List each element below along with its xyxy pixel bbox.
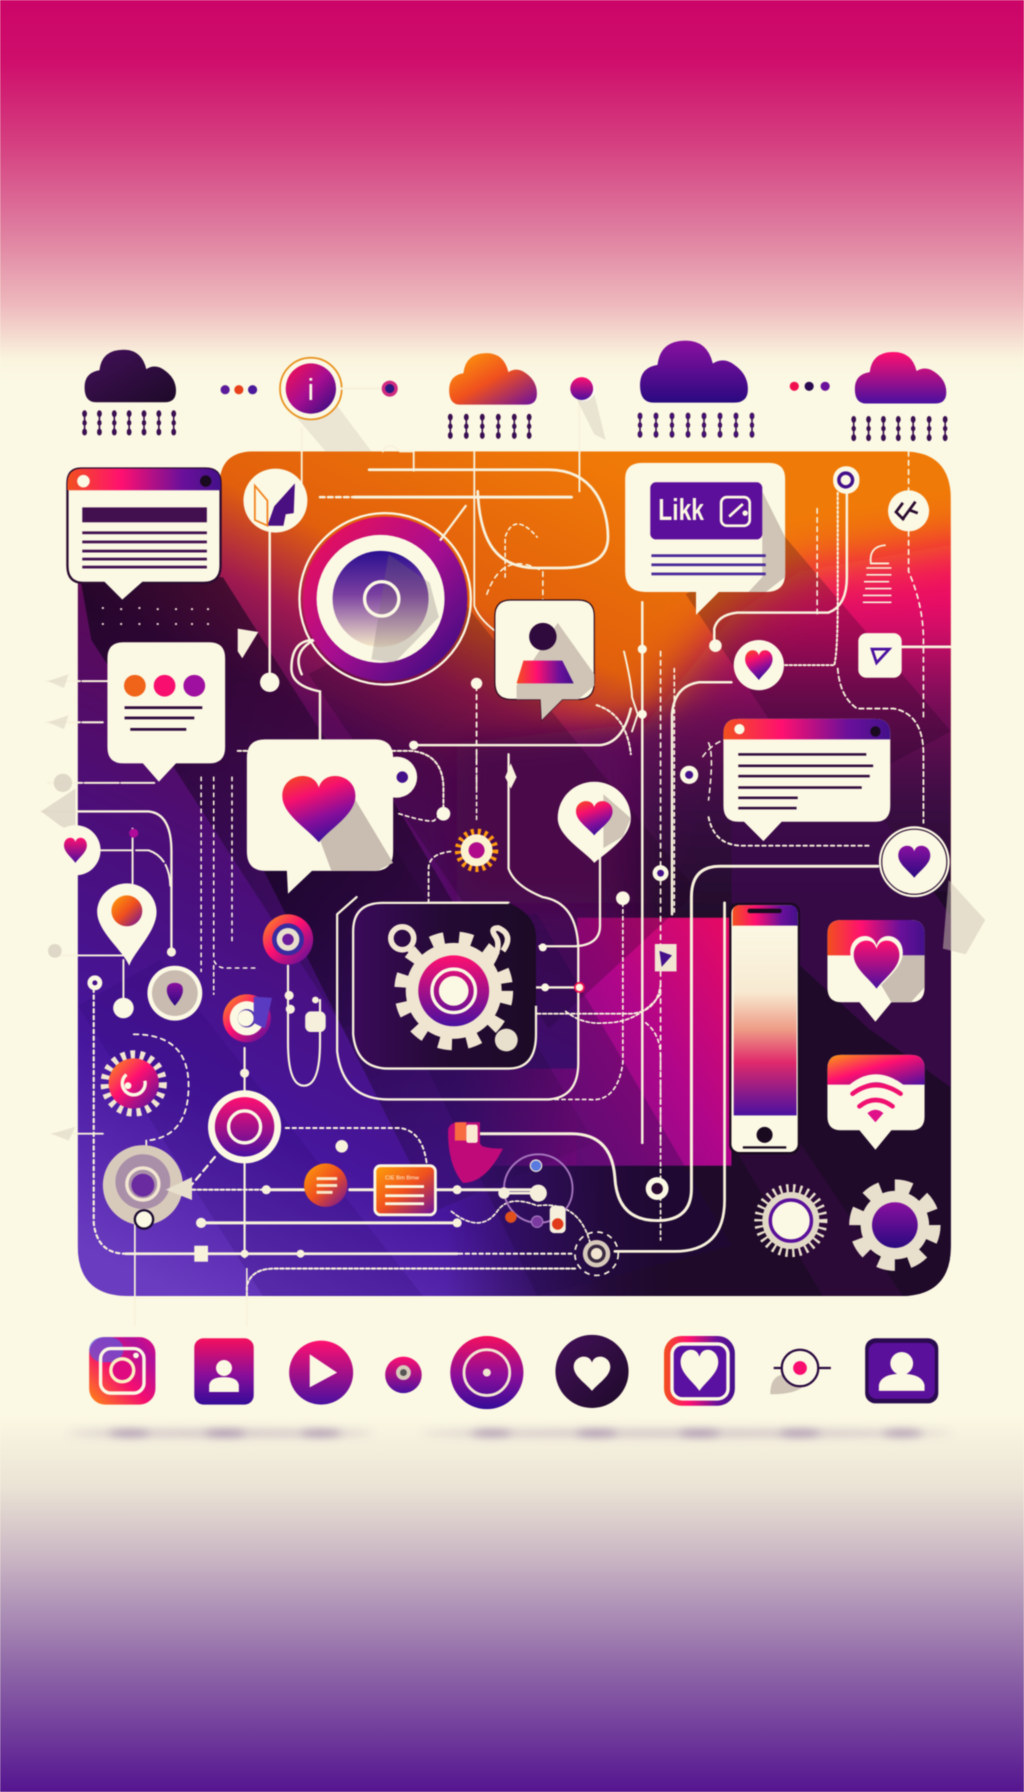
notch [747, 909, 782, 913]
small hook and stripes [863, 545, 891, 602]
node [113, 998, 134, 1018]
center ring [365, 582, 399, 616]
list card [375, 1166, 435, 1215]
glow tab [448, 1122, 503, 1183]
wifi arcs [848, 1078, 905, 1106]
like card [625, 463, 785, 615]
long shadow: like card [686, 538, 950, 763]
line end nodes [194, 1185, 462, 1262]
center gear module [353, 903, 536, 1069]
home button [757, 1127, 773, 1143]
left column items [41, 674, 202, 1229]
shade [320, 789, 393, 871]
title bar [723, 719, 890, 739]
pin heart bubble [558, 782, 631, 863]
bubble [625, 463, 785, 615]
speech bubble: heart [247, 739, 417, 894]
card title bar [67, 469, 221, 490]
ring [299, 513, 471, 685]
bubble [247, 739, 393, 894]
lines: network connectors [41, 400, 951, 1326]
heart tile [827, 920, 925, 1022]
shoulders [517, 661, 574, 683]
label icon [721, 497, 750, 526]
long shadow: center gear [429, 914, 684, 1295]
icon: user square [194, 1338, 254, 1405]
capsule node [305, 1011, 326, 1032]
node dot under M badge [260, 673, 279, 692]
small lock node [680, 766, 698, 784]
list card: CIE Bm Bmw [385, 1175, 420, 1181]
title bar dots [77, 475, 211, 487]
sun icon [459, 833, 494, 867]
handle [376, 757, 417, 798]
small ring [87, 975, 102, 990]
text lines [82, 507, 207, 568]
lens [333, 551, 429, 647]
orange list badge [304, 1163, 347, 1207]
icon: top right ring node [833, 466, 859, 494]
dots [124, 675, 205, 697]
small nodes [409, 639, 722, 821]
dots trio left [221, 385, 257, 394]
location pin [97, 883, 157, 966]
shade [517, 623, 594, 720]
icon: info badge [280, 358, 371, 451]
connector node [341, 381, 398, 397]
long shadow: window [81, 576, 392, 1025]
icon: ring target [450, 1336, 523, 1409]
phone [729, 903, 800, 1154]
cloud: orange [448, 353, 537, 438]
icon: heart tile [664, 1336, 735, 1406]
icon: small badge [858, 633, 902, 678]
icon: M envelope badge [243, 469, 307, 533]
label text: Likk [658, 492, 705, 527]
cloud: pink [852, 352, 947, 441]
gear body [406, 943, 502, 1039]
icon: crossed badge [888, 490, 929, 531]
gear core [418, 955, 489, 1026]
speech bubble: three dots [107, 642, 225, 782]
pointer tick [440, 505, 466, 541]
section: bottom icon row [89, 1335, 938, 1409]
icon: person tile [865, 1338, 938, 1403]
icon: info badge: i [307, 372, 314, 407]
gear center [439, 976, 469, 1006]
gear [105, 1055, 162, 1112]
magenta block [577, 918, 731, 1166]
icon: heart circle top right [734, 640, 784, 690]
text lines [651, 554, 766, 575]
sun gear bottom right [760, 1190, 822, 1251]
purple label [650, 482, 762, 539]
phone body [731, 905, 798, 1152]
gear rings [432, 969, 475, 1013]
drop oval [147, 966, 202, 1021]
heart [282, 776, 355, 842]
heart ring right [879, 826, 985, 954]
center plum darkening [459, 706, 686, 898]
text lines [738, 753, 873, 809]
small target [263, 914, 313, 965]
inner cream disc [317, 535, 445, 663]
gradient disc [303, 517, 467, 681]
tile [827, 1055, 925, 1150]
long shadow: lower left [80, 1004, 422, 1296]
gear bottom right [859, 1190, 930, 1261]
end ring [646, 1177, 669, 1200]
card body [67, 469, 221, 601]
head [529, 623, 557, 650]
dial [575, 1232, 618, 1275]
connector nodes right of gear [539, 865, 669, 992]
long shadow: lens [309, 606, 668, 1028]
tile top band [827, 1055, 925, 1085]
dark plum diagonal stripes [731, 820, 951, 1087]
base line [743, 1146, 786, 1149]
long shadow: heart bubble [251, 800, 594, 1211]
lower knob [495, 1029, 518, 1051]
small flag tile [655, 944, 677, 971]
icon: play [289, 1341, 353, 1405]
card body [723, 719, 890, 841]
bubble [495, 600, 594, 720]
small purple dot [129, 829, 138, 838]
icon: dark heart [555, 1335, 629, 1408]
phone outline [729, 903, 800, 1154]
window card: top left [67, 469, 221, 601]
shadow: under icon row [67, 1429, 953, 1437]
small chain nodes [167, 947, 319, 1078]
cloud: dark [83, 350, 176, 435]
card shade [749, 491, 785, 592]
tile top band [827, 920, 925, 955]
big target lens [299, 505, 471, 685]
right side crimson to dark field [618, 509, 952, 1296]
heart [850, 936, 903, 991]
gear teeth [403, 941, 504, 1041]
wifi tile [827, 1055, 925, 1150]
magenta fade left of block [482, 1068, 578, 1166]
wifi drop [867, 1110, 883, 1122]
window card: right [723, 719, 890, 841]
left stubs [41, 674, 75, 1141]
panel: network board [77, 450, 952, 1297]
icon: small pennant [238, 629, 258, 658]
panel base gradient [69, 446, 960, 1303]
target medium [208, 1090, 281, 1163]
heart circle [50, 825, 101, 875]
bubble [107, 642, 225, 782]
tile shade [880, 955, 925, 1002]
lines [125, 706, 202, 731]
phone top bar [733, 905, 798, 926]
long shadow: phone [731, 1143, 903, 1296]
title dots [734, 724, 881, 737]
lens shade [371, 554, 439, 663]
dots trio right [790, 382, 830, 391]
user card bubble [495, 600, 594, 720]
icon: small target [385, 1357, 422, 1393]
phone screen [734, 926, 797, 1115]
section: top cloud row [83, 341, 947, 451]
C icon [223, 994, 272, 1042]
heart inner [854, 941, 899, 989]
orbit diagram [498, 1154, 573, 1233]
dotted grid under window [102, 607, 209, 625]
lower center cluster [194, 1090, 669, 1275]
gear tile background [353, 903, 536, 1069]
node: magenta dot [570, 377, 606, 440]
dark lower right field [906, 892, 952, 1296]
gear tile outline [353, 903, 536, 1069]
diamond marker [505, 763, 517, 789]
left hook [391, 927, 508, 971]
dark lower center fade [458, 1165, 672, 1296]
cloud: purple [638, 341, 754, 437]
icon: camera logo [89, 1337, 155, 1405]
dot node [335, 1140, 348, 1153]
icon: small target with shadow [770, 1350, 831, 1394]
small node bottom left [135, 1210, 153, 1229]
tile [827, 920, 925, 1022]
target grey [103, 1145, 192, 1225]
